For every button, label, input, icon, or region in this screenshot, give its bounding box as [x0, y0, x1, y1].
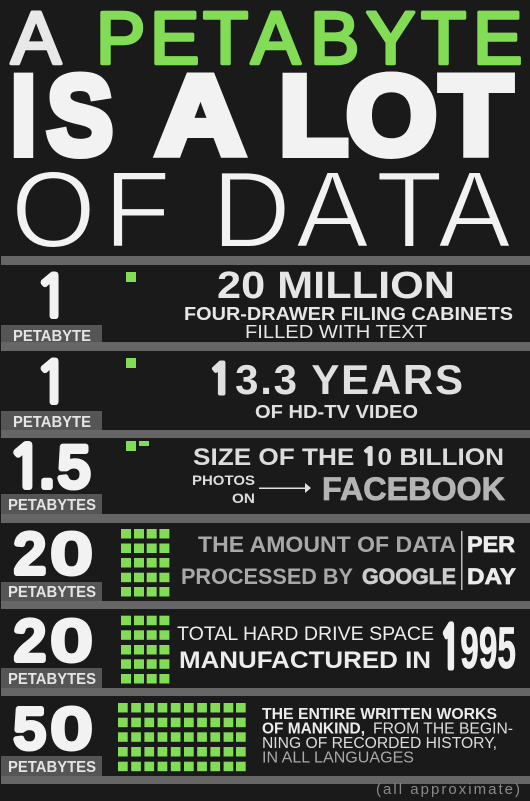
amount: 20 petabytes: PETABYTES [8, 584, 96, 601]
text: entire written works of mankind: OF MANKIND, [262, 720, 365, 738]
text: size of the 10 billion photos: ON [232, 490, 255, 506]
amount: 1.5 petabytes: 1 [8, 438, 43, 496]
text: 13.3 years of HD-TV video: OF HD-TV VIDEO [255, 402, 418, 422]
amount: 1.5 petabytes: 5 [58, 435, 90, 500]
amount: 50 petabytes [1, 697, 102, 776]
amount: 50 petabytes: PETABYTES [8, 759, 96, 776]
amount: 1.5 petabytes: . [39, 435, 55, 500]
panel: 1 petabyte, HD-TV video [1, 354, 463, 431]
amount: 20 petabytes [1, 522, 102, 601]
amount: 1 petabyte [1, 354, 102, 431]
amount: 20 petabytes: 0 [52, 522, 91, 586]
title line: IS A LOT: A [156, 53, 245, 178]
icon: one and a half green squares [126, 441, 149, 451]
text: total hard drive space manufactured in [177, 624, 434, 674]
divider bars [1, 256, 530, 784]
title [11, 0, 522, 271]
text: 20 million filing cabinets: FILLED WITH TEXT [245, 322, 427, 342]
text: total hard drive space manufactured in: TOTAL HARD DRIVE SPACE [177, 624, 434, 645]
amount: 1.5 petabytes [1, 435, 102, 514]
title line: OF DATA: OF [11, 149, 171, 271]
text: Facebook: FACEBOOK [322, 471, 505, 507]
panel: 20 petabytes, 1995 hard drives [1, 609, 516, 688]
icon: 20 green squares [121, 529, 169, 596]
text: per day: DAY [467, 564, 516, 589]
title line: IS A LOT: L [279, 53, 348, 178]
text: size of the 10 billion photos: SIZE OF THE 10 BILLION [193, 444, 504, 471]
amount: 1 petabyte [1, 268, 102, 345]
icon: 50 green squares [118, 703, 246, 771]
icon: one green square [126, 358, 136, 368]
amount: 50 petabytes: 5 [14, 697, 46, 761]
text: amount of data processed by Google [181, 532, 456, 589]
text: amount of data processed by Google: PROCESSED BY [181, 564, 353, 589]
title line: IS A LOT: O [346, 53, 437, 178]
amount: 50 petabytes: 0 [52, 697, 91, 761]
text: entire written works of mankind: NING OF RECORDED HISTORY, [262, 735, 497, 752]
amount: 1 petabyte: 1 [35, 354, 70, 412]
title line: IS A LOT: S [47, 53, 113, 178]
text: entire written works of mankind: FROM THE BEGIN- [373, 720, 513, 738]
amount: 1 petabyte: PETABYTE [13, 328, 91, 345]
panel: 1.5 petabytes, Facebook [1, 435, 505, 514]
title line: OF DATA: DATA [212, 149, 511, 271]
text: entire written works of mankind: IN ALL LANGUAGES [262, 750, 414, 766]
panel: 50 petabytes, written works [1, 697, 513, 776]
title line: OF DATA [11, 149, 511, 271]
panel: 20 petabytes, Google [1, 522, 516, 601]
title line: IS A LOT: I [11, 53, 36, 178]
amount: 20 petabytes: 2 [14, 522, 46, 586]
text: 20 million filing cabinets: FOUR-DRAWER FILING CABINETS [184, 304, 513, 324]
icon: 20 green squares [121, 616, 169, 684]
amount: 1 petabyte: 1 [35, 268, 70, 326]
amount: 20 petabytes: 2 [14, 609, 46, 673]
icon: one green square [126, 272, 136, 282]
arrow [259, 483, 311, 493]
amount: 20 petabytes: 0 [52, 609, 91, 673]
title line: IS A LOT: T [440, 53, 512, 178]
text: amount of data processed by Google: THE AMOUNT OF DATA [198, 532, 456, 557]
text: amount of data processed by Google: GOOGLE [362, 564, 456, 589]
text: total hard drive space manufactured in: MANUFACTURED IN [179, 647, 431, 674]
footnote: (all approximate) [376, 781, 520, 798]
text: per day: PER [467, 532, 515, 557]
panel: 1 petabyte, filing cabinets [1, 265, 513, 345]
amount: 1.5 petabytes: PETABYTES [8, 497, 96, 514]
amount: 20 petabytes: PETABYTES [8, 671, 96, 688]
text: entire written works of mankind [262, 706, 513, 766]
text: 20 million filing cabinets [184, 265, 513, 342]
amount: 20 petabytes [1, 609, 102, 688]
text: entire written works of mankind: THE ENTIRE WRITTEN WORKS [262, 706, 497, 723]
text: size of the 10 billion photos: PHOTOS [192, 472, 255, 488]
amount: 1 petabyte: PETABYTE [13, 414, 91, 431]
text: per day [461, 531, 516, 590]
text: 13.3 years of HD-TV video: 13.3 YEARS [208, 356, 463, 403]
title line: IS A LOT [11, 53, 512, 178]
text: size of the 10 billion photos [192, 444, 504, 506]
text: 20 million filing cabinets: 20 MILLION [217, 265, 455, 307]
